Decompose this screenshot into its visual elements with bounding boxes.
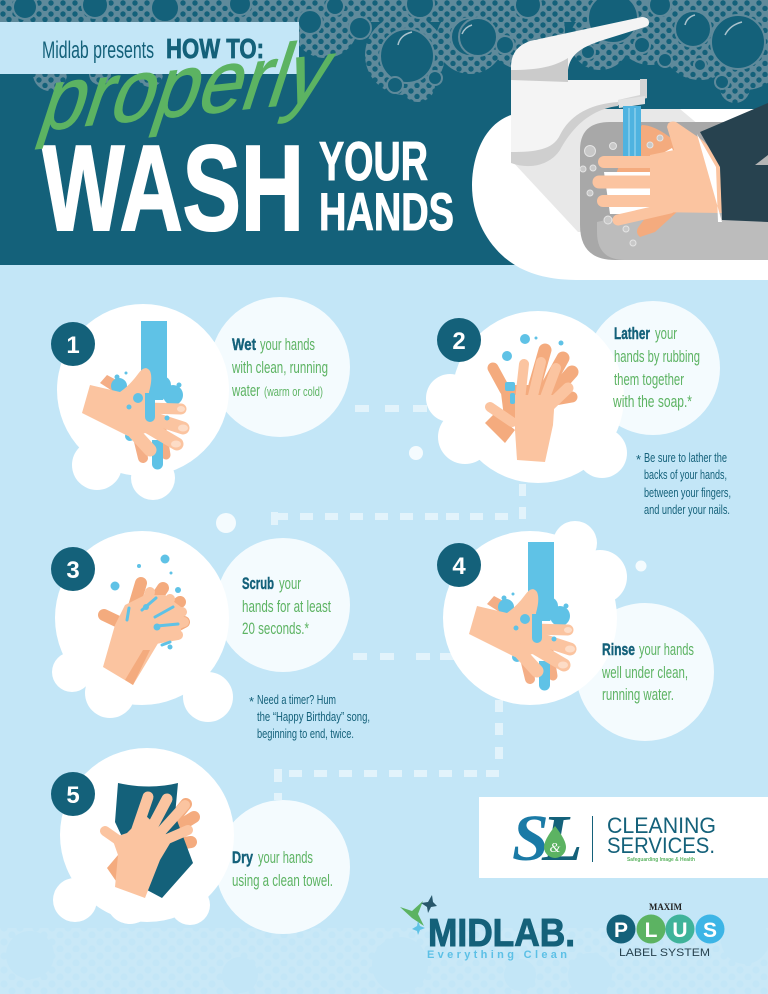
step 3 text: 20 seconds.*: [242, 619, 309, 638]
logo: S&L Cleaning Services: Safeguarding Image & Health: [627, 857, 695, 863]
step 4 text: well under clean,: [601, 663, 688, 682]
foam shape: [426, 311, 627, 483]
foam shape: [57, 304, 229, 500]
logo: S&L Cleaning Services: &: [550, 841, 561, 856]
text circle: [210, 297, 350, 437]
step 1 text: Wet: [232, 335, 256, 354]
step 2 text: [612, 324, 700, 411]
header band: [0, 0, 768, 265]
step 5 text: your hands: [258, 848, 313, 867]
step 2 text: with the soap.*: [612, 392, 692, 411]
step 2 footnote: between your fingers,: [644, 485, 731, 500]
logo: Midlab: Everything Clean: [427, 949, 567, 961]
number badge 3: 3: [66, 557, 80, 584]
step 3 text: hands for at least: [242, 597, 331, 616]
number badge 4: [437, 543, 481, 587]
step 5 text: using a clean towel.: [232, 871, 333, 890]
number badge 1: [51, 322, 95, 366]
logo: Maxim Plus label system: MAXIM: [649, 903, 682, 913]
logo: Maxim Plus label system: U: [672, 919, 688, 942]
step 4 text: [601, 640, 694, 704]
step 2 footnote: backs of your hands,: [644, 467, 727, 482]
faucet: [511, 17, 649, 166]
logo: Maxim Plus label system: P: [614, 919, 628, 942]
number badge 5: 5: [66, 782, 80, 809]
step 3 footnote: Need a timer? Hum: [257, 692, 336, 707]
panel: step 2 lather: [426, 301, 731, 517]
illustration: hands under water: [82, 321, 188, 470]
logo: Maxim Plus label system: LABEL SYSTEM: [619, 947, 710, 959]
water stream: [623, 106, 641, 160]
logo: Maxim Plus label system: S: [703, 919, 717, 942]
number badge 4: 4: [452, 553, 466, 580]
logo: S&L Cleaning Services: L: [541, 802, 582, 875]
front hand: [599, 122, 722, 220]
step 3 footnote: *: [249, 694, 254, 709]
text circle: [586, 301, 720, 435]
back hand: [610, 125, 690, 237]
title: HANDS: HANDS: [319, 183, 454, 242]
logo: Midlab: MIDLAB.: [428, 912, 575, 955]
text circle: [576, 603, 714, 741]
bubbles: [580, 135, 663, 246]
step 2 text: your: [655, 324, 677, 343]
step 5 text: [232, 848, 333, 890]
number badge 2: [437, 318, 481, 362]
step 2 text: them together: [614, 370, 684, 389]
basin: [580, 122, 768, 260]
stars: [400, 895, 437, 935]
step 4 text: your hands: [639, 640, 694, 659]
number badge 2: 2: [452, 328, 466, 355]
step 1 text: with clean, running: [231, 358, 328, 377]
step 4 text: running water.: [602, 685, 674, 704]
step 1 text: water: [231, 381, 260, 400]
illustration: drying hands with towel: [105, 783, 194, 898]
logo: S&L Cleaning Services: [479, 797, 768, 878]
illustration: lathering hands: [485, 334, 572, 462]
panel: step 1 wet: [51, 297, 350, 500]
sink body: [472, 109, 768, 280]
title band: Midlab presents HOW TO: HOW TO:: [166, 33, 264, 64]
step 2 footnote: and under your nails.: [644, 502, 730, 517]
panel: step 5 dry: [51, 748, 350, 934]
title band: Midlab presents HOW TO: [0, 22, 299, 74]
step 3 text: [242, 574, 331, 638]
step 2 footnote: Be sure to lather the: [644, 450, 727, 465]
step 4 text: Rinse: [602, 640, 635, 659]
step 5 text: Dry: [232, 848, 253, 867]
panel: step 4 rinse: [437, 521, 714, 741]
decorative dots: [216, 446, 646, 572]
step 3 text: Scrub: [242, 574, 274, 593]
step 2 footnote: [636, 450, 731, 517]
logo: Midlab: [400, 895, 575, 961]
foam on hands: [604, 172, 655, 214]
foam shape: [53, 748, 234, 925]
suit sleeve: [697, 103, 768, 222]
logo: S&L Cleaning Services: SERVICES.: [607, 833, 715, 858]
title: YOUR: YOUR: [319, 130, 428, 192]
foam shape: [52, 531, 233, 722]
number badge 3: [51, 547, 95, 591]
title: WASH: WASH: [42, 120, 304, 256]
step 3 footnote: [249, 692, 370, 741]
number badge 5: [51, 772, 95, 816]
step 2 text: hands by rubbing: [614, 347, 700, 366]
illustration: rinsing hands: [469, 542, 575, 690]
panel: step 3 scrub: [51, 531, 370, 741]
step 1 text: your hands: [260, 335, 315, 354]
illustration: sink, faucet and washing hands: [472, 17, 768, 280]
logo: Maxim Plus label system: [606, 903, 724, 959]
dashed connector lines: [271, 405, 526, 800]
step 2 text: Lather: [614, 324, 650, 343]
text circle: [216, 538, 350, 672]
step 1 text: (warm or cold): [264, 384, 323, 399]
illustration: scrubbing hands: [103, 554, 185, 685]
logo: S&L Cleaning Services: CLEANING: [607, 813, 716, 838]
title script: properly: properly: [30, 21, 347, 151]
text circle: [216, 800, 350, 934]
logo: Maxim Plus label system: L: [645, 919, 658, 942]
title band: Midlab presents HOW TO: Midlab presents: [42, 37, 154, 64]
logo: S&L Cleaning Services: S: [512, 802, 549, 875]
step 3 footnote: the “Happy Birthday” song,: [257, 709, 370, 724]
footer foam pattern: [0, 916, 768, 994]
step 3 text: your: [279, 574, 301, 593]
step 3 footnote: beginning to end, twice.: [257, 726, 354, 741]
step 1 text: [231, 335, 328, 400]
step 2 footnote: *: [636, 452, 641, 467]
foam shape: [443, 521, 627, 705]
number badge 1: 1: [66, 332, 80, 359]
foam bubbles in header: [0, 0, 768, 103]
